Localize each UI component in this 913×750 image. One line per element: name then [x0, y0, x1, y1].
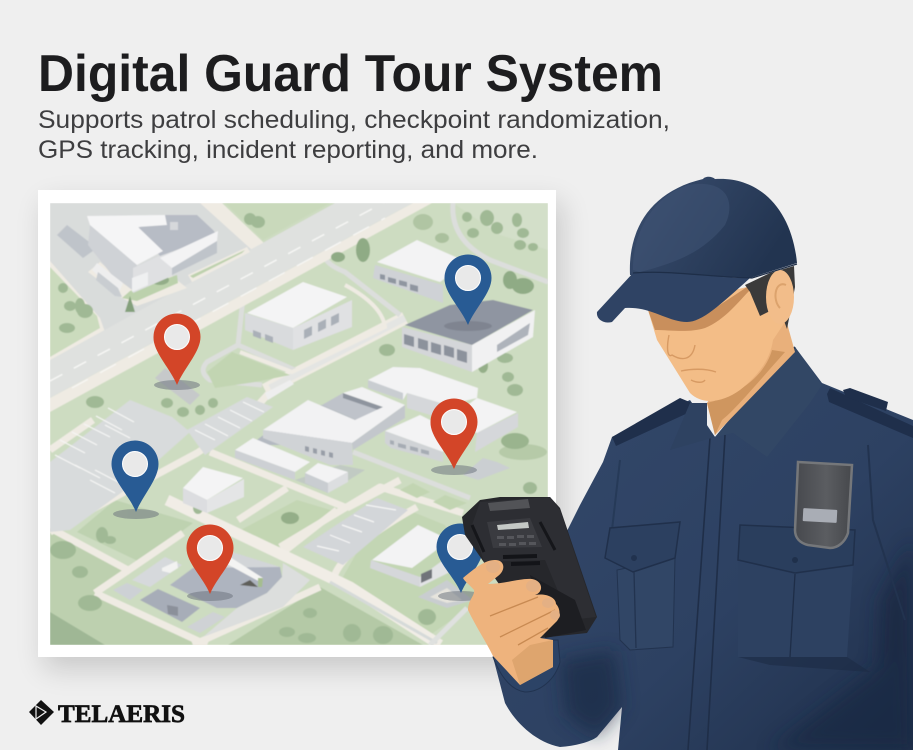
cap — [597, 177, 797, 323]
building: south warehouse — [370, 525, 450, 587]
pin: red north-west — [153, 314, 200, 385]
subtitle: Supports patrol scheduling, checkpoint randomization, — [38, 106, 670, 134]
epaulettes — [612, 388, 913, 446]
title: Digital Guard Tour System — [38, 45, 663, 103]
pin: red east — [430, 398, 478, 469]
pin: blue north-east — [444, 254, 492, 325]
building: northeast warehouse — [373, 240, 467, 303]
hair — [745, 266, 795, 329]
face — [648, 287, 785, 401]
logo: Telaeris — [29, 700, 185, 728]
pin: red south — [186, 525, 234, 594]
panel: map card — [38, 190, 556, 657]
collar — [670, 347, 822, 457]
pocket: left — [605, 522, 680, 650]
building: small office — [183, 467, 244, 513]
hand — [463, 560, 560, 685]
pin: blue south-east — [436, 523, 484, 593]
bushes — [50, 210, 547, 644]
small plots — [400, 483, 467, 510]
handheld guard tour device — [462, 497, 597, 638]
green blocks — [50, 534, 192, 645]
pin: blue west — [112, 441, 158, 512]
placket — [688, 435, 725, 750]
pocket: right — [738, 525, 870, 672]
building: central complex — [235, 367, 478, 493]
wordmark: TELAERIS — [58, 701, 185, 728]
neck — [707, 316, 795, 435]
pin ground patch — [155, 368, 200, 405]
building: central warehouse — [245, 282, 352, 350]
northwest pavement — [50, 203, 251, 330]
illustration: security guard — [462, 177, 913, 750]
building: northwest complex — [57, 215, 218, 297]
main road — [50, 203, 432, 412]
pin shadows — [113, 380, 484, 601]
gray and cream service roads — [265, 318, 405, 390]
ear — [766, 270, 794, 324]
nose and mouth — [668, 335, 716, 382]
uniform body — [493, 347, 913, 750]
parking lots — [50, 400, 190, 532]
icon: diamond mark — [29, 700, 54, 725]
northwest green — [50, 261, 105, 365]
body camera badge — [795, 462, 852, 548]
map illustration — [50, 187, 548, 645]
building: dark-roof facility — [402, 300, 535, 372]
neck shadow — [707, 350, 785, 435]
cap shadow on face — [648, 287, 750, 331]
building: small kiosk — [265, 380, 294, 400]
cream paths — [50, 392, 463, 645]
courtyard block — [207, 352, 290, 388]
subtitle: GPS tracking, incident reporting, and more. — [38, 136, 538, 164]
subtitle — [38, 106, 670, 164]
south plaza pavement — [113, 458, 510, 637]
building: east block — [385, 398, 518, 462]
